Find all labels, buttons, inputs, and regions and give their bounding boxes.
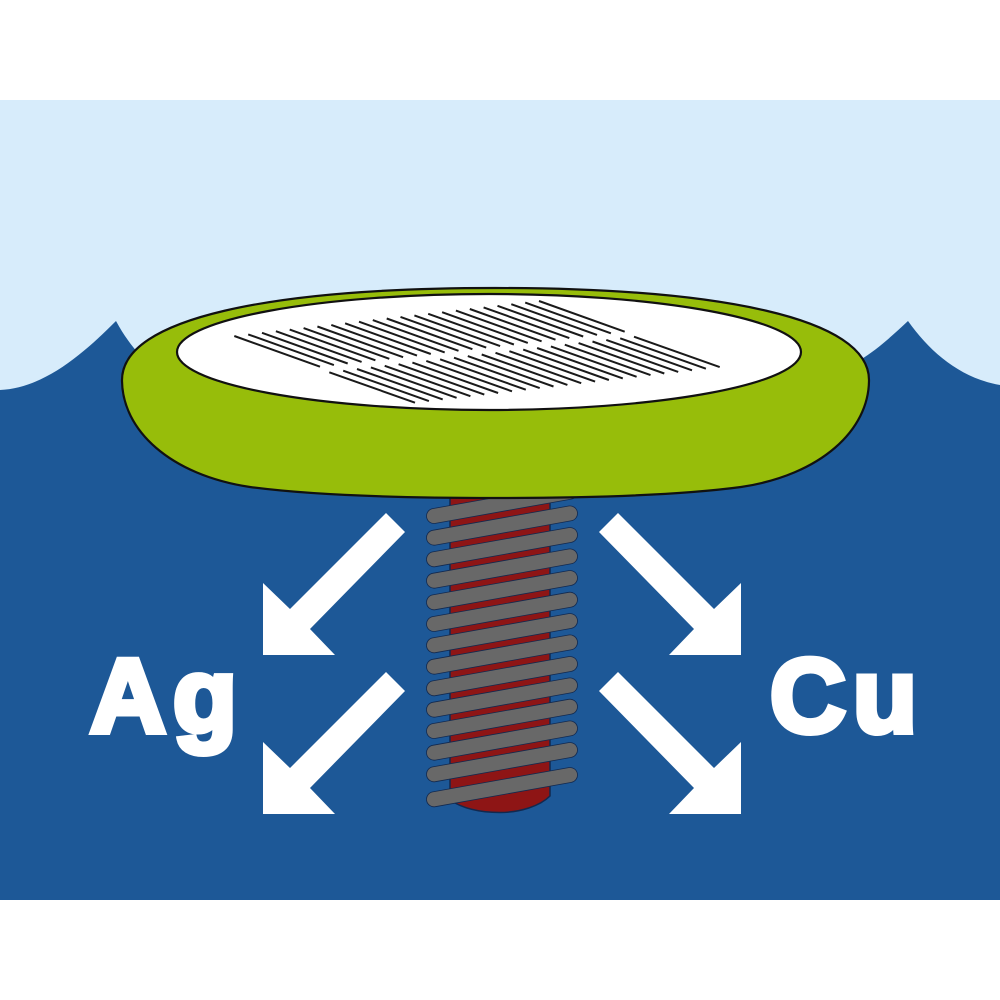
electrode core [450,495,550,812]
arrow: lower right [599,672,741,814]
panel: sky background [0,100,1000,900]
white solar panel surface [177,294,801,410]
arrow: upper right [599,513,741,655]
panel: water with waves [0,321,1000,900]
solar cell lines, upper row [234,301,625,367]
disc body [122,288,869,498]
icon: green floating disc [122,288,869,498]
icon: threaded electrode [434,492,570,812]
label: Cu: Cu [770,638,917,755]
copper coil windings [434,492,570,799]
label: Ag: Ag [90,638,237,755]
solar cell lines, lower row [329,337,720,403]
arrow: lower left [263,672,405,814]
arrow: upper left [263,513,405,655]
